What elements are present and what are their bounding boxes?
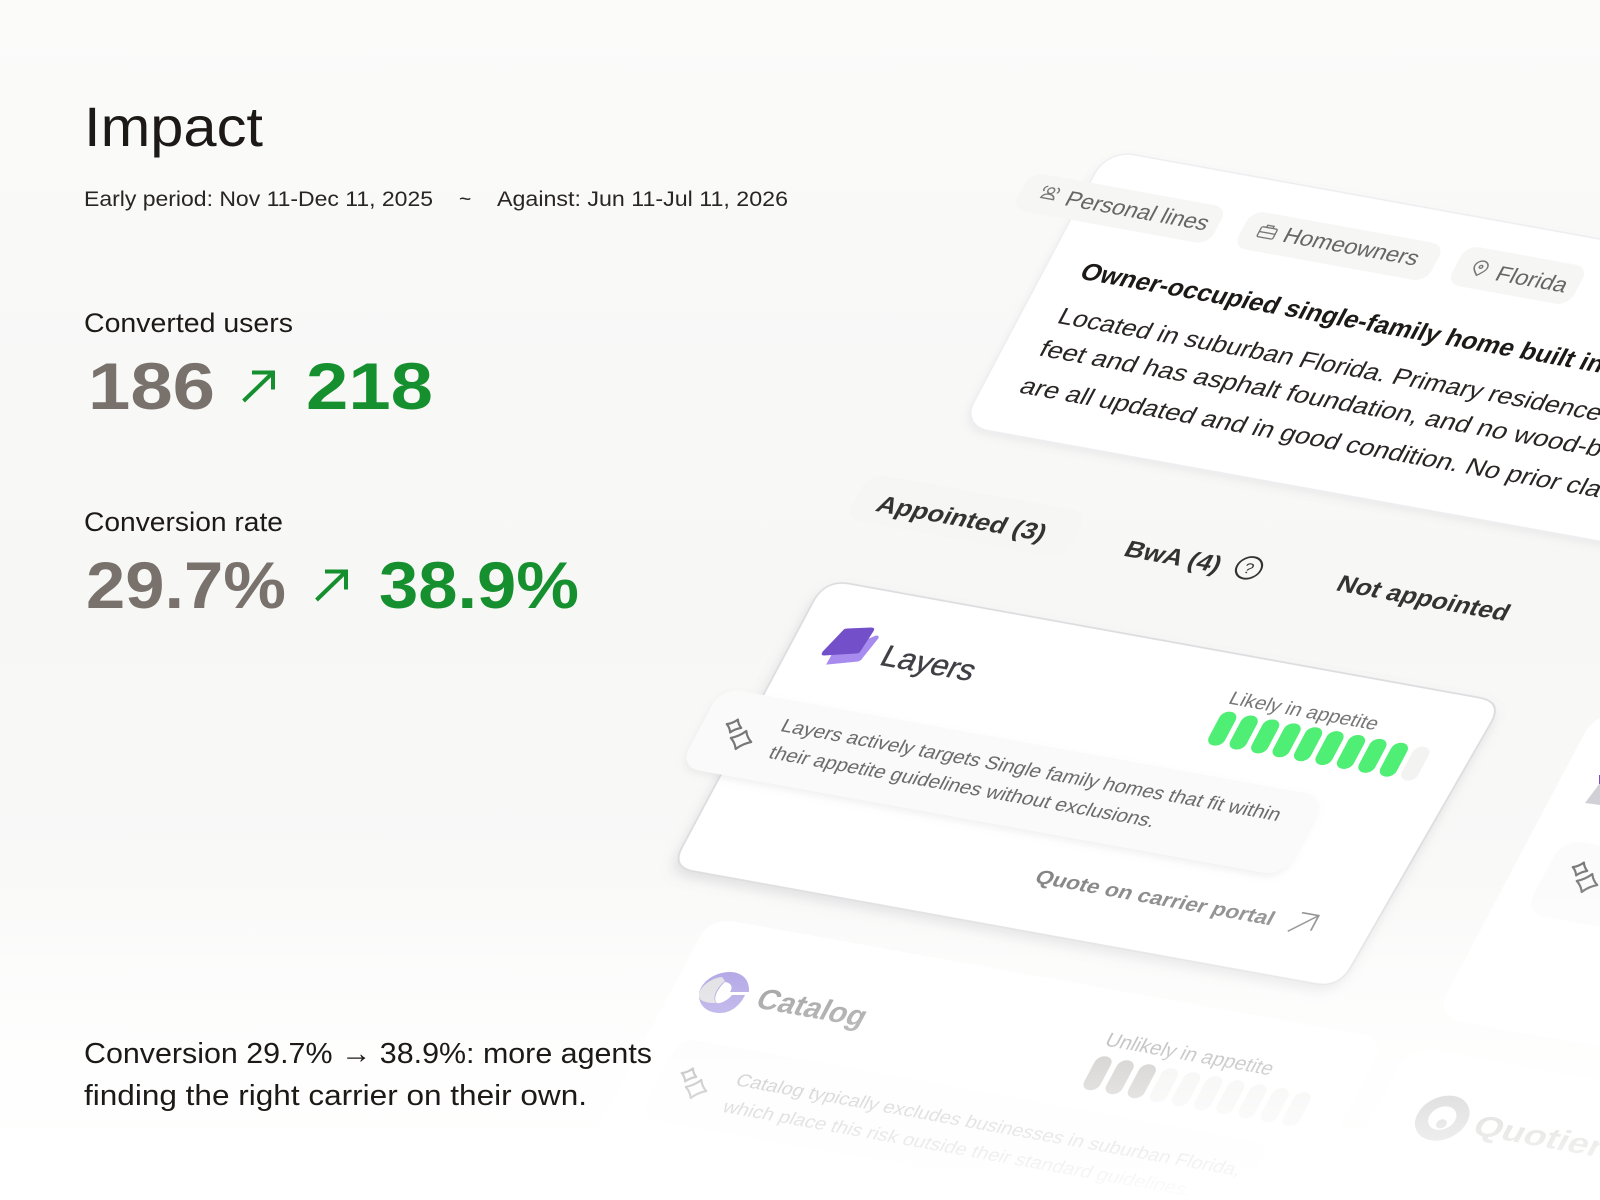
metric: conversion rate (84, 507, 579, 622)
appetite meter: unlikely (1081, 1055, 1314, 1128)
arrow: up (244, 372, 273, 401)
comparison period: Against: Jun 11-Jul 11, 2026 (497, 188, 788, 211)
panel: second carrier card (1434, 709, 1600, 1139)
panel: catalog carrier card (560, 921, 1378, 1200)
appetite label: unlikely: Unlikely in appetite (1101, 1029, 1278, 1080)
ai note: layers (679, 687, 1326, 876)
ai note: layers: Layers actively targets Single family homes that fit within (777, 716, 1285, 825)
icon: help: ? (1240, 561, 1257, 578)
ai note: catalog: Catalog typically excludes businesses in suburban Florida, (732, 1071, 1245, 1181)
ai note: layers: their appetite guidelines without exclusions. (765, 743, 1160, 832)
tag: homeowners: Homeowners (1279, 223, 1425, 270)
tilted product mockup (560, 139, 1600, 1200)
ai note: catalog: which place this risk outside their standard guidelines. (718, 1097, 1196, 1200)
logo: layers (822, 628, 878, 664)
tag: personal lines (1011, 172, 1228, 245)
comparison period: Early period: Nov 11-Dec 11, 2025 (84, 188, 433, 211)
tag: florida (1446, 245, 1589, 306)
tag: homeowners (1233, 210, 1445, 282)
tag: personal lines: Personal lines (1061, 186, 1215, 235)
metric: conversion rate: 38.9% (379, 548, 579, 622)
property description: Located in suburban Florida. Primary residence (1053, 303, 1600, 426)
tab: appointed (845, 473, 1088, 559)
metric: conversion rate: Conversion rate (84, 507, 283, 537)
carrier name: layers: Layers (875, 639, 983, 687)
takeaway: finding the right carrier on their own. (84, 1080, 587, 1112)
logo: catalog (699, 972, 749, 1013)
comparison period: ~ (459, 188, 471, 211)
panel: layers carrier card (630, 572, 1502, 990)
tab: appointed: Appointed (3) (871, 491, 1052, 546)
property description: feet and has asphalt foundation, and no wood-b (1035, 336, 1600, 462)
logo: quotient (1415, 1098, 1470, 1138)
tag: florida: Florida (1491, 261, 1573, 297)
icon: sparkle layers note (727, 720, 751, 749)
icon: help (1232, 555, 1266, 581)
property description: are all updated and in good condition. No prior cla (1015, 373, 1600, 503)
metric: converted users: 186 (88, 349, 215, 423)
logo: second carrier partial (1585, 775, 1600, 805)
link: quote on carrier portal: Quote on carrier portal (1031, 867, 1279, 930)
ai note: second carrier (1524, 839, 1600, 1002)
property description (1015, 303, 1600, 503)
metric: converted users: Converted users (84, 308, 293, 338)
arrow: up (316, 572, 346, 600)
tab: not appointed: Not appointed (1332, 571, 1515, 626)
metric: conversion rate: 29.7% (86, 548, 286, 622)
tab: bwa: BwA (4) (1119, 536, 1227, 578)
comparison period (84, 188, 788, 211)
ai note: catalog (638, 1038, 1271, 1200)
takeaway (84, 1038, 652, 1112)
takeaway: Conversion 29.7% → 38.9%: more agents (84, 1038, 652, 1070)
panel: quotient carrier card (1328, 1049, 1600, 1200)
appetite meter: likely (1205, 710, 1432, 782)
metric: converted users: 218 (306, 349, 433, 423)
icon: sparkle second note (1573, 863, 1597, 892)
title: Impact (84, 95, 263, 158)
carrier name: catalog: Catalog (750, 982, 874, 1033)
icon: sparkle catalog note (682, 1069, 706, 1098)
appetite label: likely: Likely in appetite (1225, 688, 1383, 735)
metric: converted users (84, 308, 433, 423)
panel: property summary card (902, 139, 1600, 604)
link: quote on carrier portal (1031, 866, 1319, 937)
tabs (845, 473, 1521, 637)
